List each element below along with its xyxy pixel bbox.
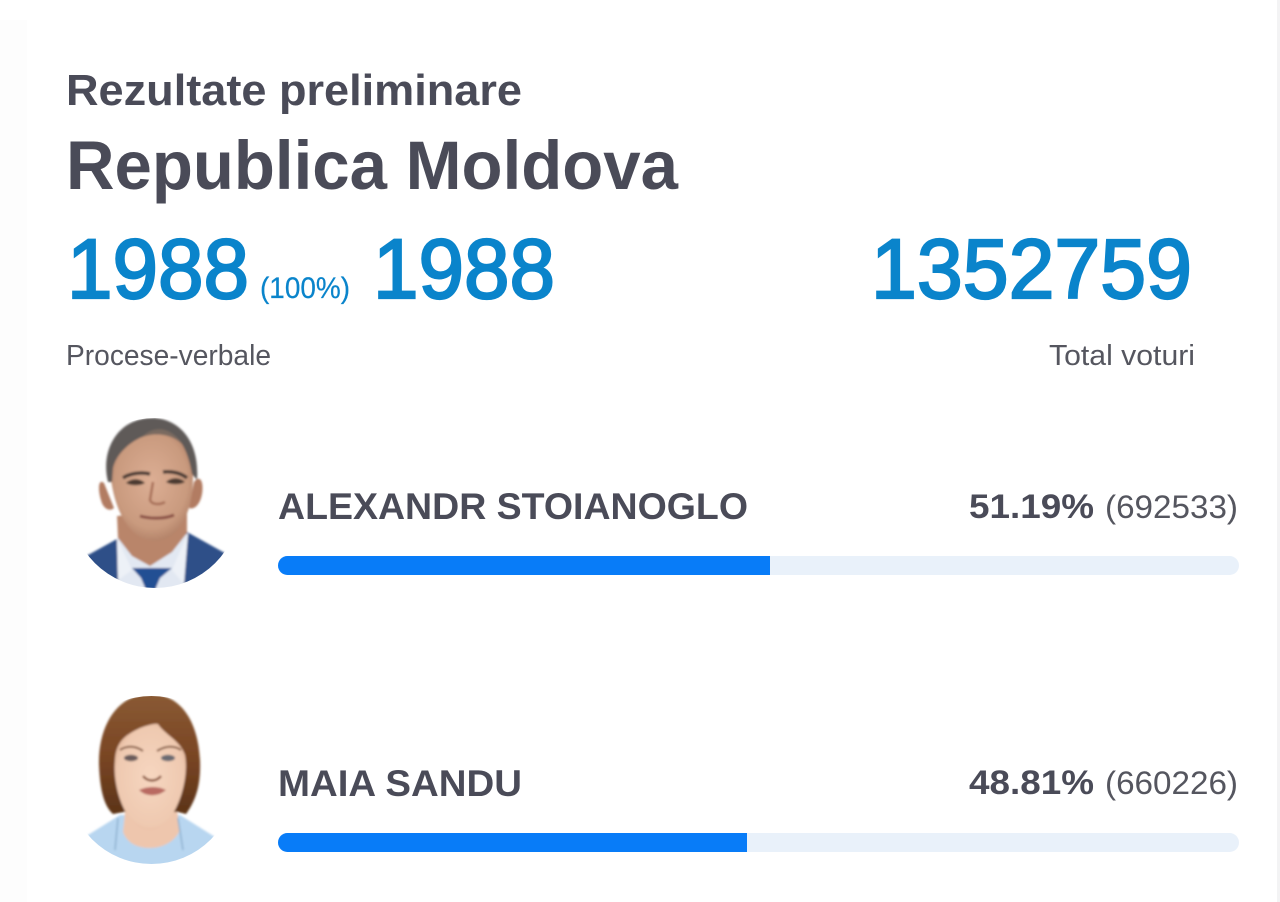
candidate row: Maia Sandu [88,696,1239,864]
percentage and votes [969,764,1238,802]
name: ALEXANDR STOIANOGLO [278,486,748,527]
stat: total votes: Total voturi [1049,340,1195,372]
percentage and votes [969,488,1238,526]
heading: subtitle: Rezultate preliminare [66,66,522,115]
stat: processed reports: 1988 [67,222,249,316]
stat: processed reports: Procese-verbale [66,340,271,372]
stat: processed reports: 1988 [373,222,555,316]
portrait: Alexandr Stoianoglo [87,418,225,588]
stat: total votes [871,222,1195,372]
portrait: Maia Sandu [88,696,214,864]
stat: processed reports: (100%) [260,272,350,305]
name: MAIA SANDU [278,763,522,804]
percentage and votes: (660226) [1105,765,1238,801]
progress bar [278,556,1239,575]
percentage and votes: 48.81% [969,764,1094,802]
percentage and votes: 51.19% [969,488,1094,526]
heading: title: Republica Moldova [66,127,679,204]
stat: total votes: 1352759 [871,222,1192,316]
candidate row: Alexandr Stoianoglo [60,418,1239,600]
stat: processed reports [66,222,555,372]
percentage and votes: (692533) [1105,489,1238,525]
progress bar [278,833,1239,852]
